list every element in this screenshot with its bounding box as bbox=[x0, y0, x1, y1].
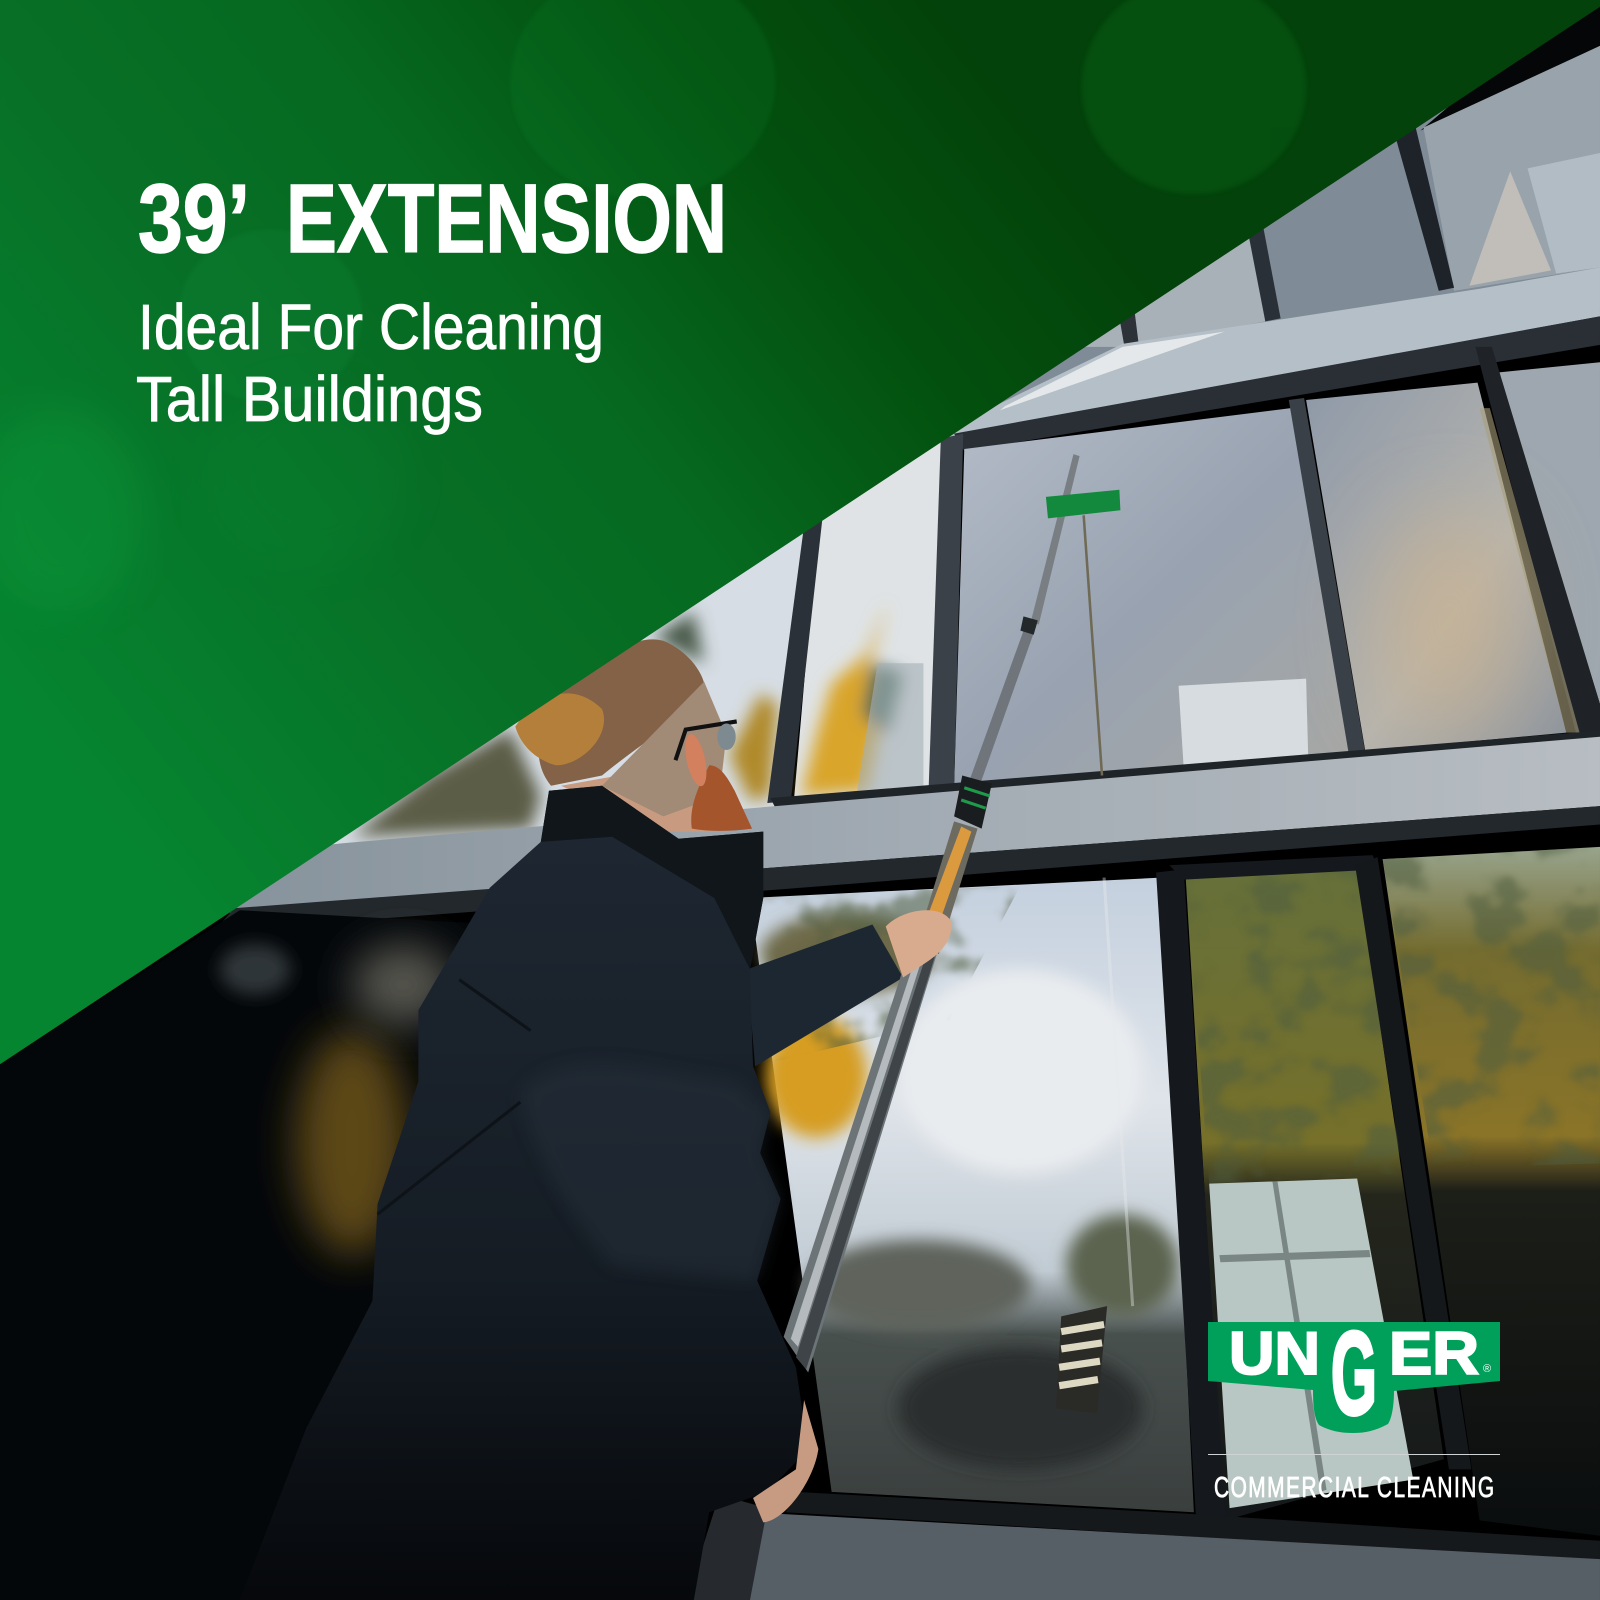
brush head bbox=[1046, 490, 1120, 518]
window mullions bbox=[767, 500, 824, 803]
logo wordmark bbox=[1229, 1308, 1491, 1439]
logo wordmark: UN bbox=[1229, 1320, 1320, 1387]
dark left window and foreground bbox=[0, 910, 480, 1600]
building: horizontal beam bbox=[214, 737, 1600, 931]
building: middle floor windows bbox=[306, 347, 1600, 847]
logo: Unger Commercial Cleaning bbox=[1208, 1308, 1500, 1504]
title: 39’ bbox=[138, 164, 250, 273]
subtitle: Tall Buildings bbox=[136, 363, 483, 435]
green diagonal panel bbox=[0, 0, 1600, 1064]
man bun bbox=[515, 693, 604, 765]
reflected yellow tree bbox=[352, 602, 903, 837]
jacket collar bbox=[541, 786, 763, 969]
water hose bbox=[1084, 515, 1102, 776]
telescopic pole bbox=[784, 454, 1133, 1372]
logo badge bbox=[1208, 1322, 1500, 1433]
upper hand bbox=[886, 910, 952, 978]
subtitle bbox=[136, 291, 604, 435]
logo tagline: COMMERCIAL CLEANING bbox=[1214, 1472, 1494, 1504]
beard bbox=[691, 765, 752, 831]
pole clamps bbox=[954, 776, 992, 829]
logo divider bbox=[1208, 1454, 1500, 1455]
subtitle: Ideal For Cleaning bbox=[138, 291, 604, 363]
ear bbox=[681, 732, 710, 788]
interior boxes bbox=[1209, 1179, 1413, 1508]
mullions lower bbox=[1156, 869, 1227, 1529]
tree reflections bbox=[760, 913, 1179, 1469]
arm bbox=[747, 924, 903, 1066]
jacket shading bbox=[520, 1063, 781, 1281]
title bbox=[138, 164, 727, 273]
man in jacket bbox=[240, 639, 903, 1600]
building: upper floor bbox=[918, 0, 1600, 451]
foliage texture bbox=[750, 847, 1600, 1184]
shaved side of head bbox=[602, 682, 727, 816]
title: EXTENSION bbox=[286, 164, 727, 273]
body bbox=[240, 786, 808, 1600]
logo wordmark: ER bbox=[1389, 1320, 1479, 1387]
bokeh highlights bbox=[0, 0, 1306, 612]
glasses bbox=[676, 721, 737, 760]
building: lower floor windows bbox=[750, 847, 1600, 1600]
logo wordmark: G bbox=[1331, 1308, 1377, 1439]
logo wordmark: ® bbox=[1483, 1363, 1491, 1375]
pole handle bbox=[686, 1495, 767, 1600]
lower hand bbox=[753, 1400, 818, 1522]
hair bbox=[539, 639, 705, 786]
neck bbox=[561, 760, 714, 832]
